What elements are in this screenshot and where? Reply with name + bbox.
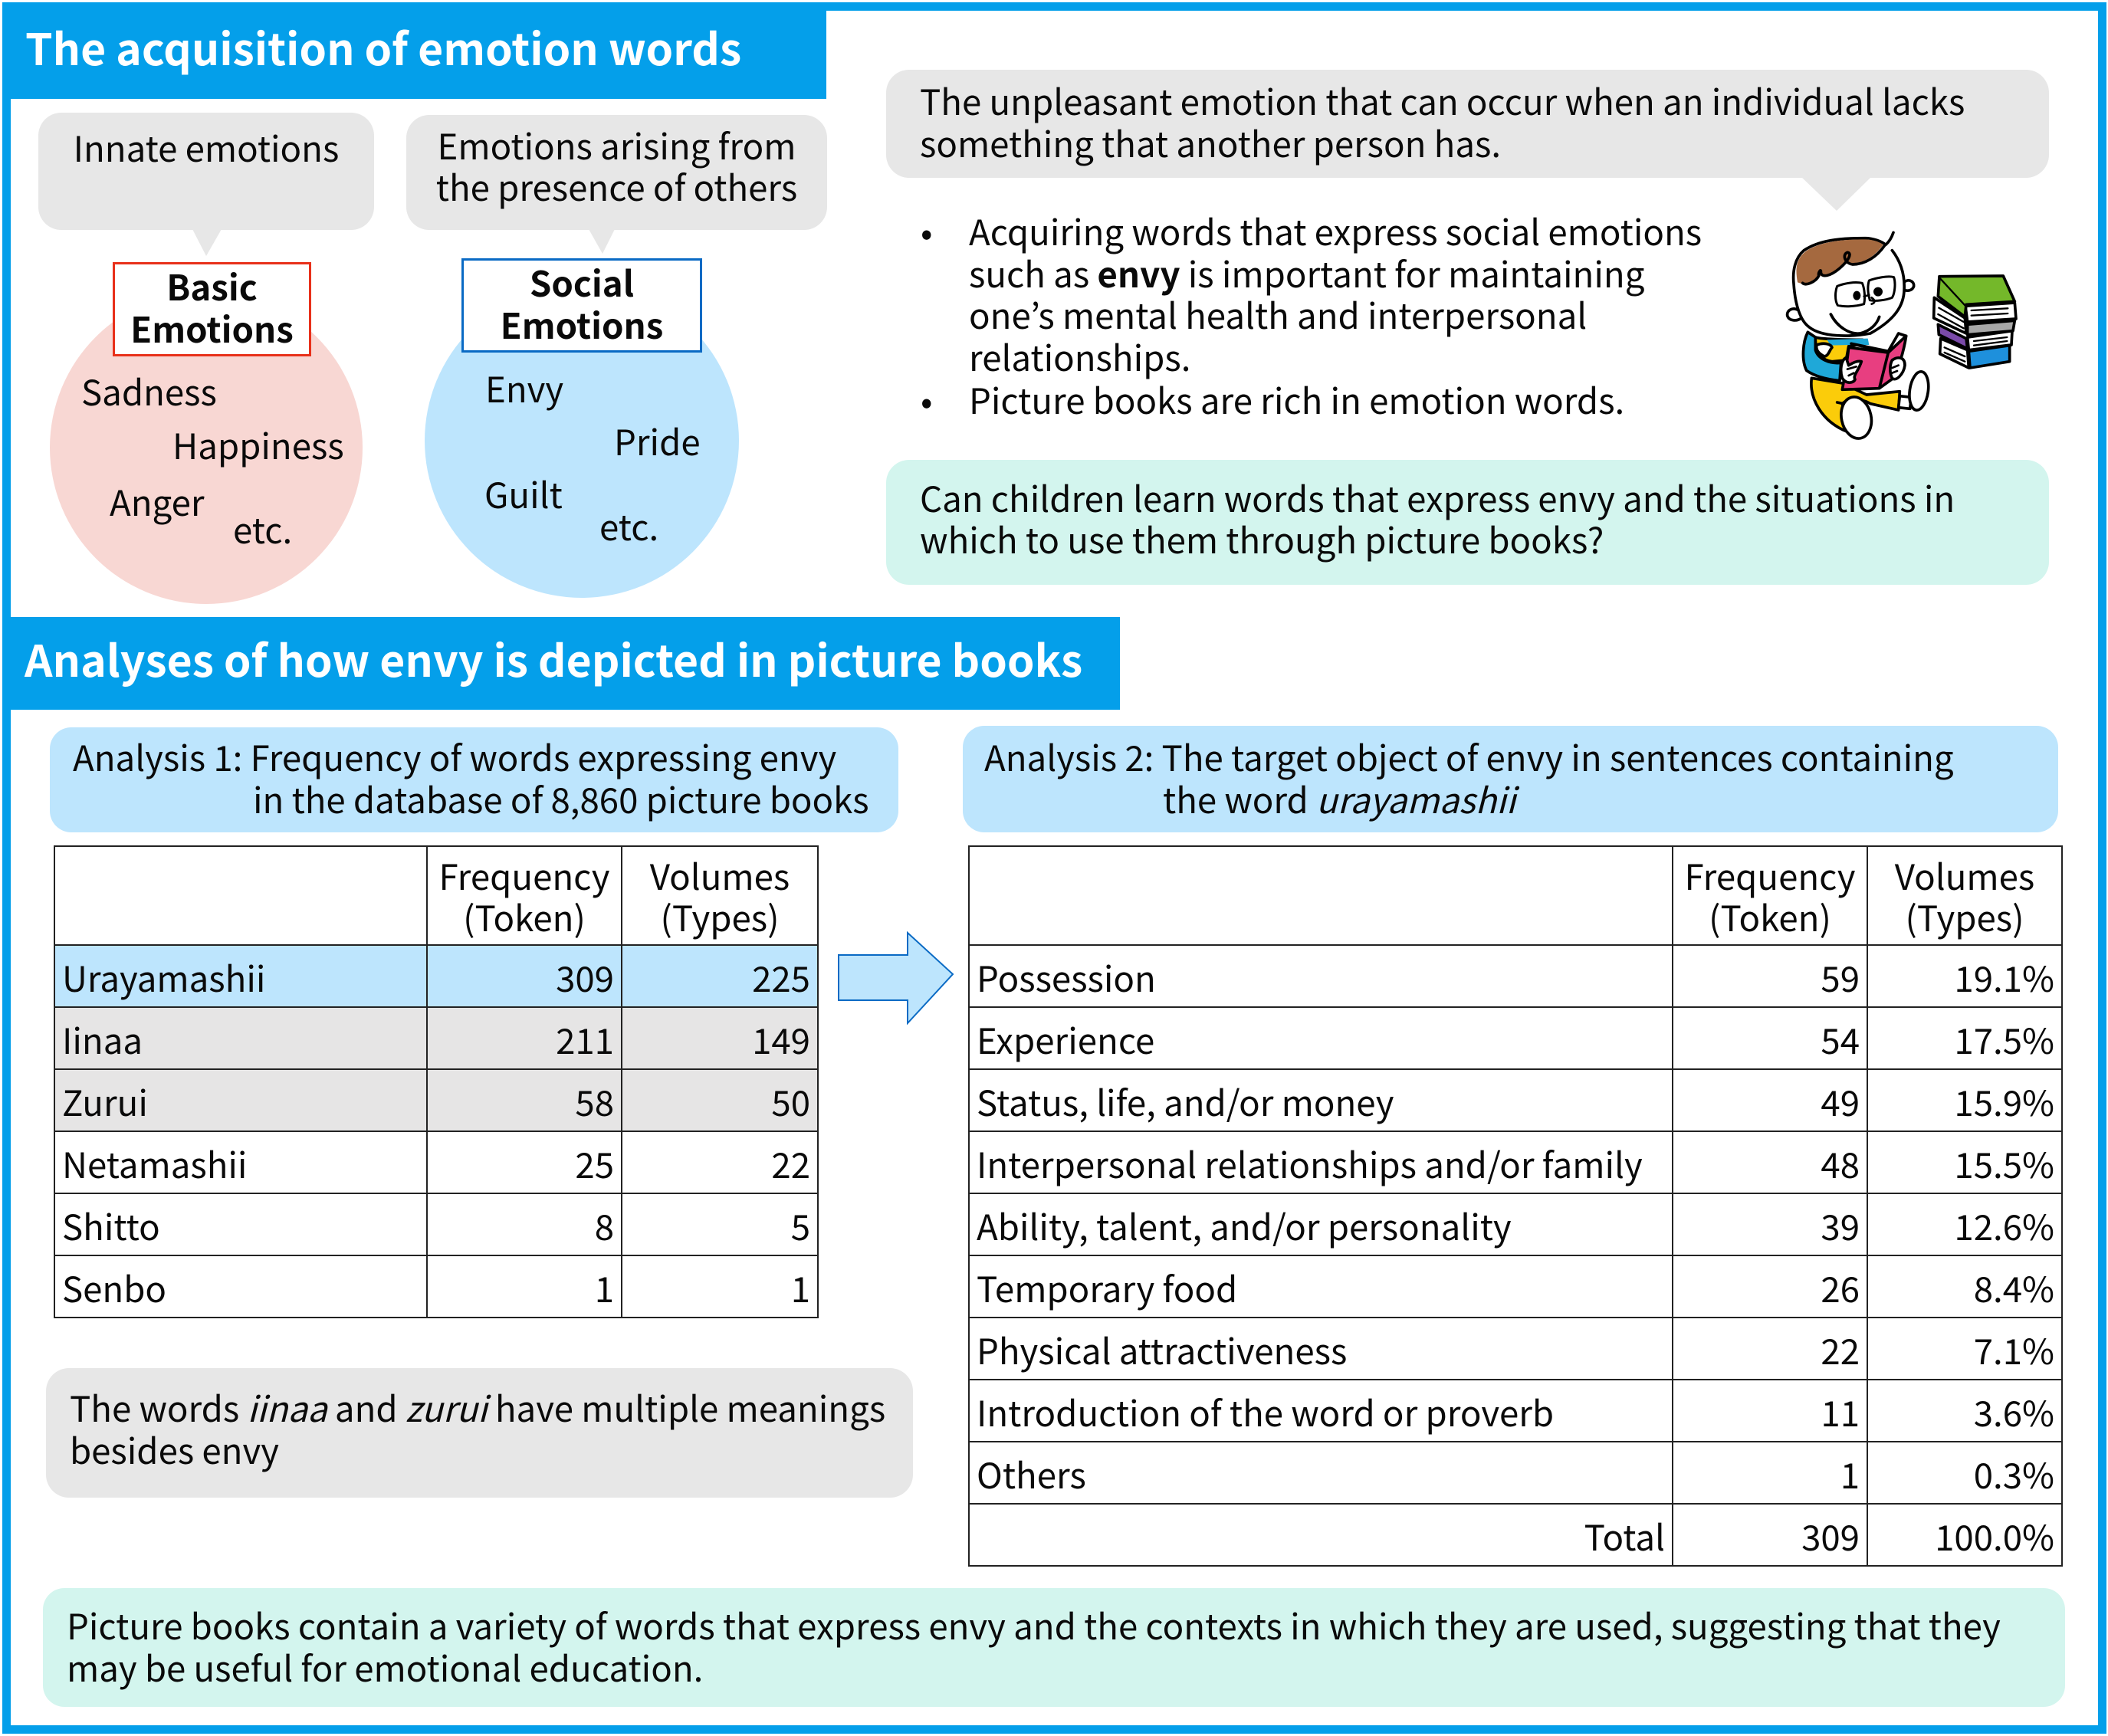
heading: the acquisition of emotion words [2, 2, 826, 99]
panel: basic emotions [50, 261, 363, 604]
callout: research question [886, 460, 2049, 585]
callout: emotions arising from others: the presence of others [436, 161, 797, 212]
text block: bullet points: Acquiring words that express social emotions [969, 205, 1702, 256]
table: target object of envy: 39 [1821, 1200, 1860, 1251]
panel heading: analysis 2: Analysis 2: The target object of envy in sentences containing [984, 731, 1954, 782]
panel: basic emotions: etc. [233, 504, 292, 554]
table: target object of envy: 7.1% [1974, 1324, 2054, 1375]
table: target object of envy: 19.1% [1954, 952, 2054, 1003]
table: frequency of envy words: Iinaa [62, 1013, 143, 1064]
callout: conclusion: may be useful for emotional education. [67, 1642, 703, 1692]
callout: multiple meanings note [46, 1368, 913, 1498]
panel heading: analysis 2: the word urayamashii [1163, 773, 1515, 824]
table: frequency of envy words: 58 [575, 1076, 614, 1127]
text block: bullet points: such as envy is important for maintaining [969, 248, 1644, 298]
panel heading: analysis 1: Analysis 1: Frequency of words expressing envy [73, 731, 836, 782]
heading: analyses of how envy is depicted: Analyses of how envy is depicted in picture books [25, 627, 1082, 690]
table: target object of envy: 15.9% [1954, 1076, 2054, 1127]
table: target object of envy: 59 [1821, 952, 1860, 1003]
table: target object of envy: 8.4% [1974, 1262, 2054, 1312]
table: target object of envy: 17.5% [1954, 1013, 2054, 1064]
table: frequency of envy words: 309 [556, 952, 614, 1003]
table: target object of envy: 0.3% [1974, 1449, 2054, 1499]
table: frequency of envy words: 5 [791, 1200, 810, 1251]
table: frequency of envy words: Netamashii [62, 1137, 247, 1188]
text block: bullet points: • [921, 205, 933, 256]
panel: social emotions: Envy [485, 363, 563, 413]
table: target object of envy: Experience [977, 1013, 1154, 1064]
panel: basic emotions: Basic [166, 261, 258, 311]
table: frequency of envy words: Frequency [439, 850, 609, 901]
callout: innate emotions [38, 113, 374, 256]
table: target object of envy: Temporary food [977, 1262, 1237, 1312]
text block: bullet points: relationships. [969, 331, 1190, 382]
table: target object of envy: 54 [1821, 1013, 1860, 1064]
table: frequency of envy words: 25 [575, 1137, 614, 1188]
table: target object of envy: Physical attractiveness [977, 1324, 1347, 1375]
callout: innate emotions: Innate emotions [74, 122, 339, 172]
callout: conclusion: Picture books contain a variety of words that express envy and the contexts in which they are used, suggesting that they [67, 1600, 2001, 1650]
table: frequency of envy words: Urayamashii [62, 952, 265, 1003]
table: frequency of envy words: Shitto [62, 1200, 160, 1251]
heading: the acquisition of emotion words: The acquisition of emotion words [25, 15, 741, 78]
callout: definition of envy: something that another person has. [920, 117, 1501, 168]
callout: definition of envy [886, 70, 2049, 211]
table: target object of envy: Interpersonal relationships and/or family [977, 1137, 1643, 1188]
table: target object of envy: 1 [1840, 1449, 1860, 1499]
table: frequency of envy words: 22 [771, 1137, 810, 1188]
table: frequency of envy words: Senbo [62, 1262, 166, 1312]
panel: basic emotions: Anger [110, 476, 205, 527]
table: target object of envy: 26 [1821, 1262, 1860, 1312]
text block: bullet points [921, 205, 1702, 425]
table: target object of envy: Volumes [1895, 850, 2034, 901]
table: frequency of envy words: Volumes [650, 850, 790, 901]
table: frequency of envy words: 149 [752, 1013, 810, 1064]
callout: emotions arising from others: Emotions arising from [438, 120, 796, 170]
callout: research question: Can children learn words that express envy and the situations in [920, 472, 1955, 523]
table: target object of envy [968, 845, 2063, 1567]
panel: social emotions: Social [530, 257, 634, 307]
table: target object of envy: 49 [1821, 1076, 1860, 1127]
panel heading: analysis 2 [963, 726, 2058, 832]
panel: basic emotions: Happiness [172, 419, 344, 470]
table: target object of envy: Others [977, 1449, 1086, 1499]
panel: social emotions [425, 257, 739, 598]
table: frequency of envy words: (Token) [463, 891, 586, 942]
table: frequency of envy words: 1 [595, 1262, 614, 1312]
panel: social emotions: Guilt [484, 468, 563, 519]
table: target object of envy: Introduction of the word or proverb [977, 1386, 1554, 1436]
callout: emotions arising from others [406, 115, 827, 253]
table: target object of envy: Total [1584, 1510, 1665, 1560]
arrow: analysis 1 to analysis 2 [838, 930, 954, 1026]
table: target object of envy: Status, life, and/or money [977, 1076, 1394, 1127]
text block: bullet points: Picture books are rich in emotion words. [969, 374, 1624, 425]
table: target object of envy: 22 [1821, 1324, 1860, 1375]
panel heading: analysis 1 [50, 727, 898, 832]
table: target object of envy: (Types) [1905, 891, 2024, 942]
text block: bullet points: • [921, 374, 933, 425]
table: frequency of envy words: 1 [791, 1262, 810, 1312]
callout: research question: which to use them through picture books? [920, 514, 1604, 564]
table: target object of envy: 48 [1821, 1137, 1860, 1188]
table: target object of envy: Ability, talent, and/or personality [977, 1200, 1512, 1251]
table: frequency of envy words: 211 [556, 1013, 614, 1064]
heading: analyses of how envy is depicted [2, 617, 1120, 710]
callout: multiple meanings note: besides envy [70, 1424, 279, 1475]
table: frequency of envy words [54, 845, 819, 1318]
text block: bullet points: one’s mental health and interpersonal [969, 289, 1587, 340]
table: target object of envy: 309 [1801, 1510, 1860, 1560]
table: frequency of envy words: (Types) [660, 891, 780, 942]
callout: definition of envy: The unpleasant emotion that can occur when an individual lacks [920, 75, 1965, 126]
table: target object of envy: 3.6% [1974, 1386, 2054, 1436]
callout: multiple meanings note: The words iinaa and zurui have multiple meanings [70, 1382, 885, 1432]
panel: social emotions: etc. [599, 500, 658, 551]
panel heading: analysis 1: in the database of 8,860 picture books [253, 773, 869, 824]
panel: social emotions: Pride [614, 415, 701, 466]
table: target object of envy: 12.6% [1954, 1200, 2054, 1251]
panel: social emotions: Emotions [501, 299, 663, 349]
table: target object of envy: Frequency [1685, 850, 1855, 901]
callout: conclusion [43, 1588, 2065, 1707]
table: frequency of envy words: 225 [752, 952, 810, 1003]
panel: basic emotions: Emotions [130, 303, 294, 353]
panel: basic emotions: Sadness [81, 366, 217, 416]
table: target object of envy: 15.5% [1954, 1137, 2054, 1188]
table: frequency of envy words: 8 [595, 1200, 614, 1251]
table: target object of envy: (Token) [1709, 891, 1831, 942]
table: target object of envy: 100.0% [1935, 1510, 2054, 1560]
table: frequency of envy words: Zurui [62, 1076, 148, 1127]
table: target object of envy: 11 [1821, 1386, 1860, 1436]
icon: child reading a book beside a stack of books [1786, 231, 2018, 440]
table: frequency of envy words: 50 [771, 1076, 810, 1127]
table: target object of envy: Possession [977, 952, 1156, 1003]
